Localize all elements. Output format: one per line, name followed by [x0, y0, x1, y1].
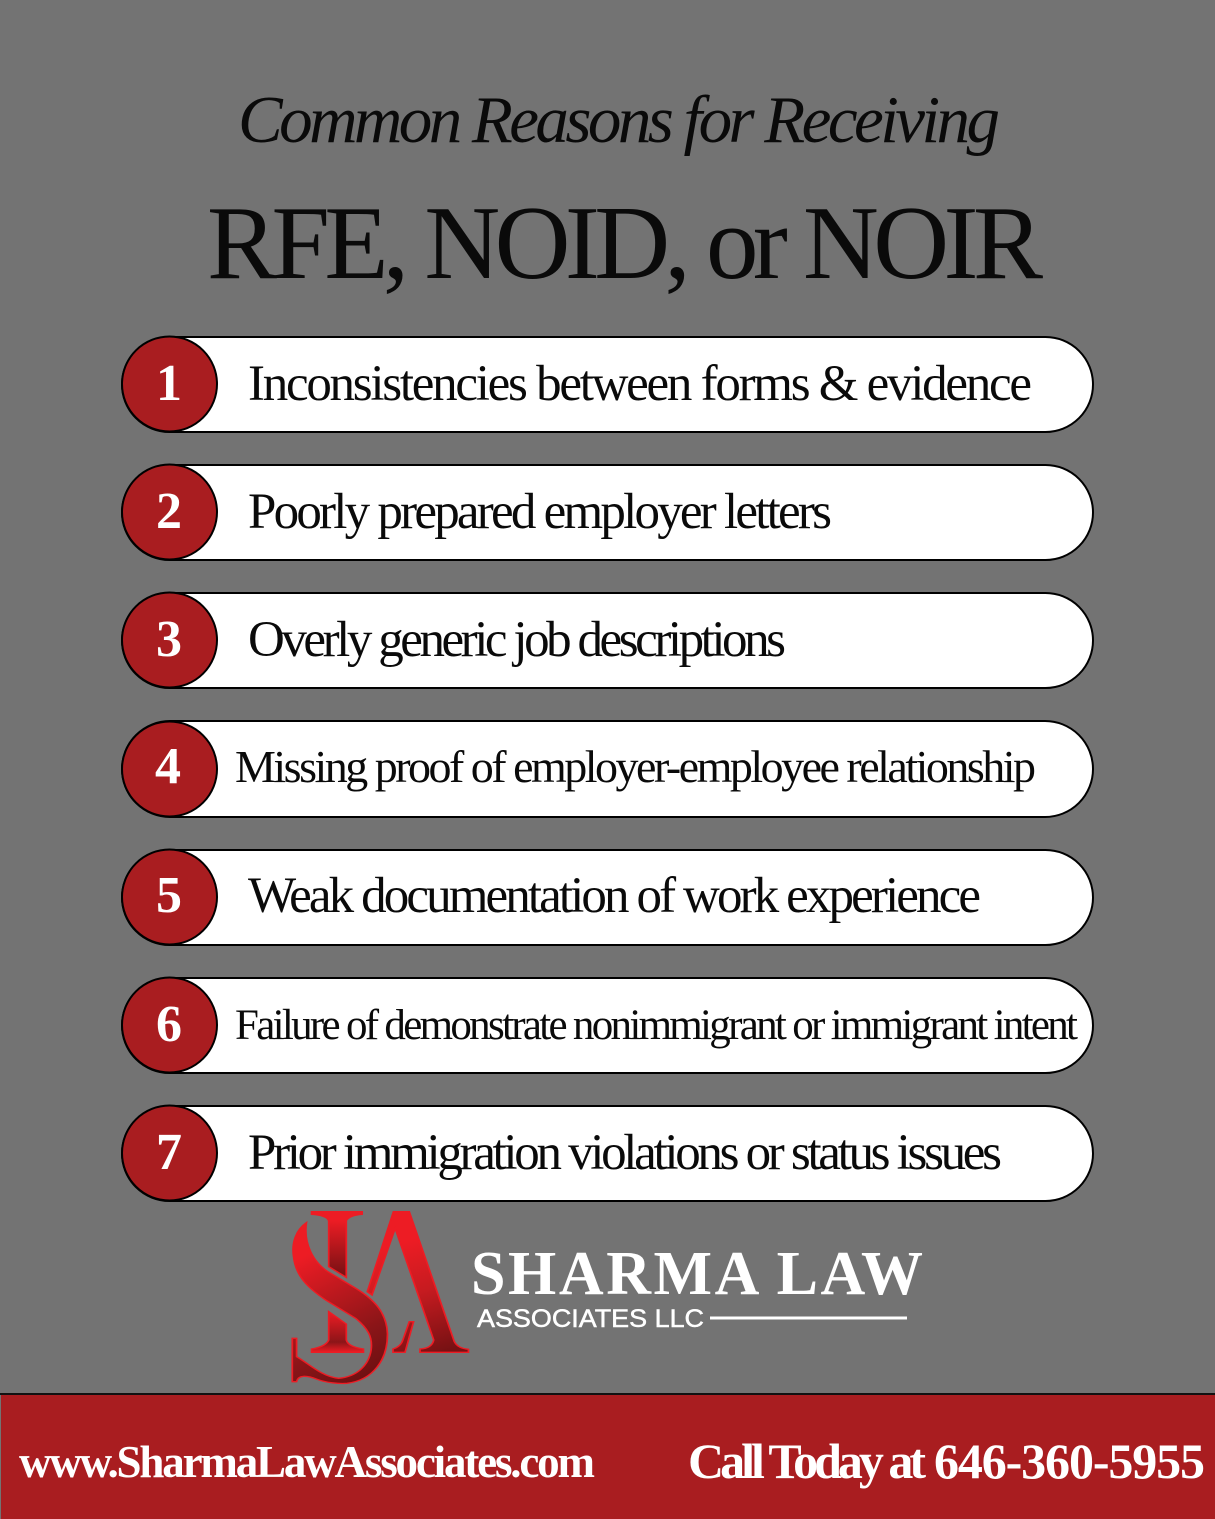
number badge 3 — [122, 592, 217, 688]
list item 7 — [122, 1106, 1093, 1201]
logo: Sharma Law Associates — [292, 1212, 923, 1383]
list item 1 — [122, 336, 1093, 432]
footer bar — [0, 1393, 1215, 1519]
list item 6 — [122, 978, 1093, 1073]
list item 3 — [122, 592, 1093, 688]
item text 4: Missing proof of employer-employee relationship — [235, 741, 1036, 792]
icon: SA monogram — [292, 1212, 468, 1383]
number badge 2 — [122, 464, 217, 560]
list item 4 — [122, 721, 1093, 817]
item text 5: Weak documentation of work experience — [248, 868, 981, 924]
list item 4: 4 — [155, 738, 181, 795]
list item 1: 1 — [156, 355, 182, 412]
list item 2 — [122, 464, 1093, 560]
item text 2: Poorly prepared employer letters — [248, 484, 832, 540]
list item 5 — [122, 850, 1093, 945]
list item 3: 3 — [156, 611, 182, 668]
number badge 6 — [122, 978, 217, 1072]
item text 7: Prior immigration violations or status issues — [248, 1125, 1002, 1181]
logo subtitle: ASSOCIATES LLC — [477, 1305, 704, 1333]
heading: RFE, NOID, or NOIR: RFE, NOID, or NOIR — [207, 184, 1043, 301]
list item 2: 2 — [156, 483, 182, 540]
phone call to action — [688, 1433, 1205, 1489]
number badge 7 — [122, 1106, 217, 1200]
list item 6: 6 — [156, 996, 182, 1053]
list item 5: 5 — [156, 867, 182, 924]
number badge 1 — [122, 336, 217, 432]
phone call to action: Call Today at — [688, 1433, 926, 1489]
item text 6: Failure of demonstrate nonimmigrant or immigrant intent — [235, 1002, 1078, 1049]
heading: common reasons: Common Reasons for Receiving — [238, 83, 1000, 157]
number badge 4 — [122, 722, 217, 816]
phone call to action: 646-360-5955 — [934, 1433, 1205, 1489]
list item 7: 7 — [156, 1124, 182, 1181]
number badge 5 — [122, 850, 217, 944]
item text 1: Inconsistencies between forms & evidence — [248, 356, 1032, 412]
title — [207, 83, 1043, 301]
logo name: SHARMA LAW — [471, 1240, 923, 1308]
item text 3: Overly generic job descriptions — [248, 612, 786, 668]
website: www.SharmaLawAssociates.com — [19, 1437, 595, 1487]
